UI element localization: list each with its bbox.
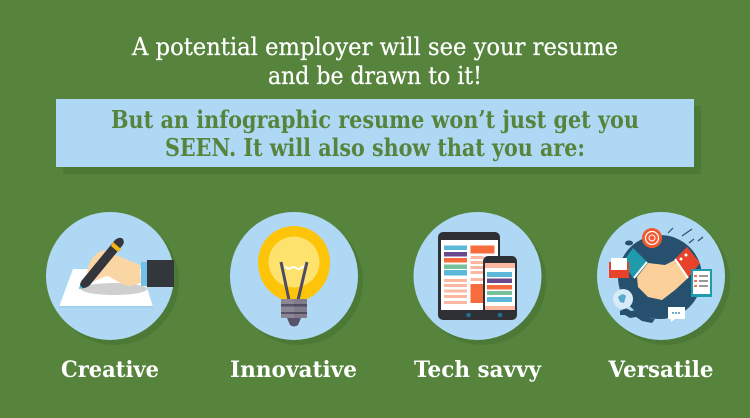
panel: versatile: [597, 212, 730, 383]
label: creative: Creative: [61, 357, 159, 383]
callout text: SEEN. It will also show that you are:: [165, 133, 585, 162]
icon: handshake with business objects: [609, 228, 712, 323]
label: versatile: Versatile: [608, 357, 714, 383]
panel: innovative: [230, 212, 363, 383]
callout text: But an infographic resume won’t just get you: [111, 105, 639, 134]
callout panel: [56, 99, 701, 174]
intro text: A potential employer will see your resume: [131, 33, 618, 61]
icon: hand writing on paper: [59, 238, 174, 308]
panel: creative: [46, 212, 179, 383]
intro text: and be drawn to it!: [268, 62, 482, 90]
label: innovative: Innovative: [230, 357, 357, 383]
label: tech savvy: Tech savvy: [414, 357, 542, 383]
intro text: [131, 33, 618, 90]
panel: tech savvy: [414, 212, 546, 383]
icon: tablet and phone: [438, 232, 517, 320]
icon: light bulb: [258, 226, 330, 326]
callout text: [111, 105, 639, 162]
